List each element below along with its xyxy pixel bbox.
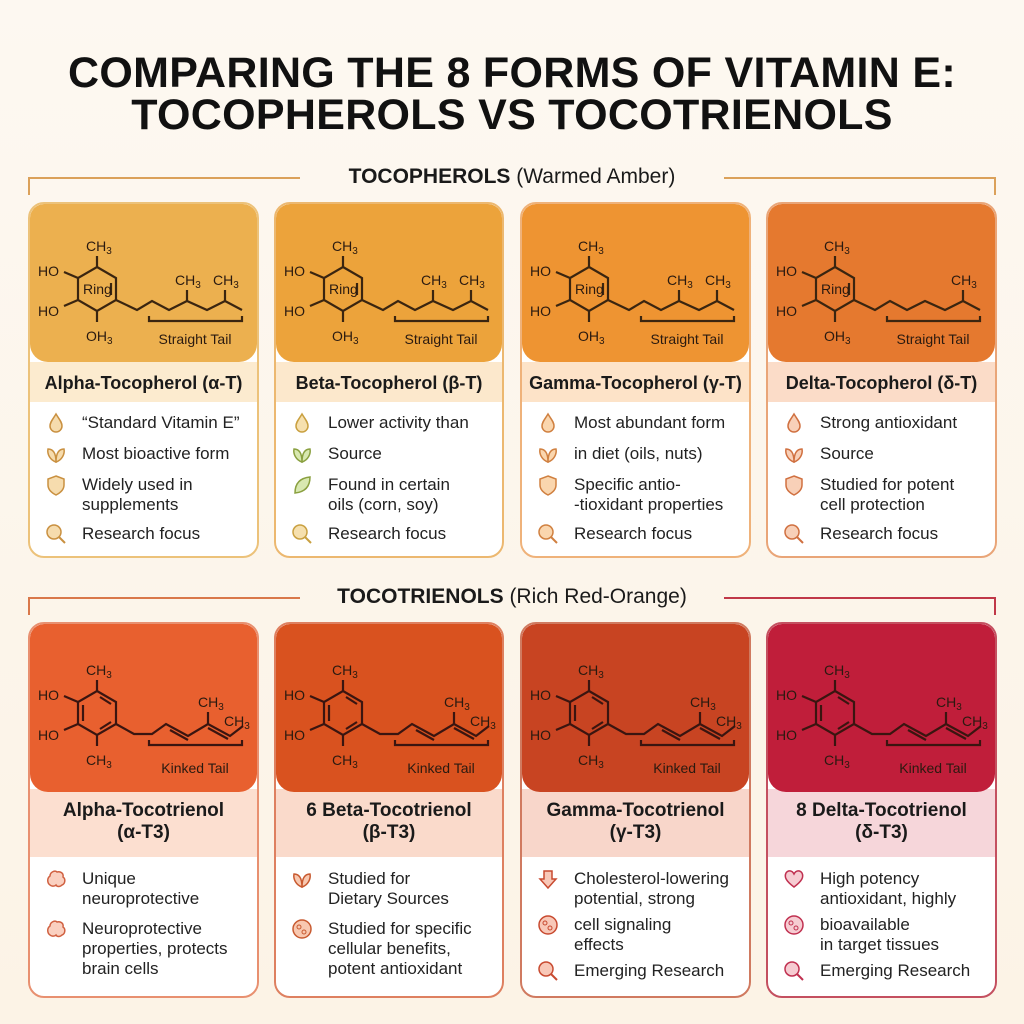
list: effects: [574, 935, 624, 954]
molecule: 3: [725, 280, 731, 291]
title: [68, 49, 956, 139]
name: [546, 800, 725, 843]
molecule: 3: [353, 336, 359, 347]
molecule: 3: [352, 760, 358, 771]
card: alpha-tocotrienol: [28, 622, 259, 998]
molecule: 3: [106, 760, 112, 771]
list: Found in certain: [328, 475, 450, 494]
molecule: OH: [332, 328, 353, 344]
list: antioxidant, highly: [820, 889, 956, 908]
list: Strong antioxidant: [820, 413, 957, 432]
molecule: CH: [459, 272, 479, 288]
card: beta-tocotrienol: [274, 622, 504, 998]
molecule: Kinked Tail: [161, 760, 229, 776]
molecule: HO: [530, 727, 551, 743]
list: cellular benefits,: [328, 939, 451, 958]
list: [784, 412, 957, 544]
name: Beta-Tocopherol (β-T): [296, 373, 482, 393]
list: oils (corn, soy): [328, 495, 439, 514]
name: Delta-Tocopherol (δ-T): [786, 373, 977, 393]
text: TOCOPHEROLS (Warmed Amber): [349, 165, 675, 188]
molecule: [530, 662, 742, 776]
list: Emerging Research: [820, 961, 970, 980]
list: “Standard Vitamin E”: [82, 413, 239, 432]
name: (γ-T3): [610, 822, 661, 843]
name: 8 Delta-Tocotrienol: [796, 800, 967, 821]
molecule: Ring: [83, 281, 112, 297]
list: Most bioactive form: [82, 444, 229, 463]
list: bioavailable: [820, 915, 910, 934]
list: Unique: [82, 869, 136, 888]
list: Source: [820, 444, 874, 463]
list: [538, 412, 725, 544]
molecule: 3: [844, 246, 850, 257]
name: 6 Beta-Tocotrienol: [306, 800, 472, 821]
molecule: HO: [530, 263, 551, 279]
list: in target tissues: [820, 935, 939, 954]
card: alpha-tocopherol: [28, 202, 259, 558]
list: Lower activity than: [328, 413, 469, 432]
molecule: 3: [195, 280, 201, 291]
name: Alpha-Tocopherol (α-T): [45, 373, 242, 393]
molecule: 3: [107, 336, 113, 347]
molecule: OH: [86, 328, 107, 344]
molecule: Kinked Tail: [899, 760, 967, 776]
molecule: Straight Tail: [159, 331, 231, 347]
list: -tioxidant properties: [574, 495, 723, 514]
molecule: 3: [598, 246, 604, 257]
molecule: 3: [844, 670, 850, 681]
molecule: Ring: [821, 281, 850, 297]
list: Studied for specific: [328, 919, 472, 938]
molecule: 3: [710, 702, 716, 713]
molecule: 3: [845, 336, 851, 347]
molecule: 3: [844, 760, 850, 771]
molecule: 3: [956, 702, 962, 713]
molecule: CH: [86, 752, 106, 768]
molecule: 3: [971, 280, 977, 291]
list: Dietary Sources: [328, 889, 449, 908]
molecule: 3: [598, 760, 604, 771]
list: Source: [328, 444, 382, 463]
molecule: CH: [705, 272, 725, 288]
text: TOCOTRIENOLS (Rich Red-Orange): [337, 585, 687, 608]
molecule: 3: [479, 280, 485, 291]
molecule: Straight Tail: [405, 331, 477, 347]
list: Neuroprotective: [82, 919, 202, 938]
card: gamma-tocopherol: [520, 202, 751, 558]
list: in diet (oils, nuts): [574, 444, 702, 463]
molecule: CH: [213, 272, 233, 288]
molecule: 3: [352, 246, 358, 257]
list: [538, 869, 729, 981]
molecule: 3: [599, 336, 605, 347]
list: neuroprotective: [82, 889, 199, 908]
card: gamma-tocotrienol: [520, 622, 751, 998]
molecule: Ring: [575, 281, 604, 297]
molecule: HO: [284, 263, 305, 279]
molecule: 3: [464, 702, 470, 713]
list: [46, 412, 239, 544]
list: Specific antio-: [574, 475, 681, 494]
molecule: Ring: [329, 281, 358, 297]
list: cell signaling: [574, 915, 671, 934]
title: COMPARING THE 8 FORMS OF VITAMIN E:: [68, 49, 956, 97]
molecule: HO: [38, 727, 59, 743]
list: Research focus: [574, 524, 692, 543]
molecule: CH: [444, 694, 464, 710]
molecule: CH: [962, 713, 982, 729]
molecule: CH: [578, 238, 598, 254]
list: properties, protects: [82, 939, 228, 958]
list: Research focus: [820, 524, 938, 543]
molecule: 3: [244, 721, 250, 732]
molecule: [776, 238, 982, 347]
molecule: HO: [284, 303, 305, 319]
molecule: 3: [598, 670, 604, 681]
molecule: 3: [106, 246, 112, 257]
molecule: CH: [332, 238, 352, 254]
molecule: Kinked Tail: [407, 760, 475, 776]
molecule: 3: [218, 702, 224, 713]
molecule: [284, 662, 496, 776]
list: cell protection: [820, 495, 925, 514]
molecule: HO: [38, 687, 59, 703]
molecule: Straight Tail: [897, 331, 969, 347]
molecule: OH: [824, 328, 845, 344]
card: beta-tocopherol: [274, 202, 504, 558]
molecule: HO: [530, 303, 551, 319]
list: High potency: [820, 869, 919, 888]
molecule: CH: [936, 694, 956, 710]
molecule: CH: [224, 713, 244, 729]
name: Alpha-Tocotrienol: [63, 800, 224, 821]
list: [292, 412, 469, 544]
list: potent antioxidant: [328, 959, 462, 978]
molecule: Straight Tail: [651, 331, 723, 347]
molecule: 3: [233, 280, 239, 291]
molecule: CH: [421, 272, 441, 288]
list: potential, strong: [574, 889, 695, 908]
list: Most abundant form: [574, 413, 725, 432]
name: [63, 800, 224, 843]
molecule: CH: [690, 694, 710, 710]
molecule: HO: [776, 687, 797, 703]
list: Studied for potent: [820, 475, 954, 494]
name: (δ-T3): [855, 822, 908, 843]
molecule: 3: [352, 670, 358, 681]
molecule: CH: [86, 662, 106, 678]
molecule: CH: [470, 713, 490, 729]
molecule: CH: [578, 752, 598, 768]
name: (α-T3): [117, 822, 170, 843]
molecule: CH: [332, 662, 352, 678]
molecule: HO: [776, 303, 797, 319]
list: Research focus: [82, 524, 200, 543]
list: Studied for: [328, 869, 410, 888]
list: Research focus: [328, 524, 446, 543]
list: Widely used in: [82, 475, 193, 494]
molecule: 3: [982, 721, 988, 732]
molecule: CH: [198, 694, 218, 710]
molecule: CH: [824, 238, 844, 254]
molecule: CH: [951, 272, 971, 288]
molecule: CH: [716, 713, 736, 729]
list: supplements: [82, 495, 178, 514]
name: Gamma-Tocopherol (γ-T): [529, 373, 742, 393]
name: [796, 800, 967, 843]
molecule: HO: [776, 263, 797, 279]
name: (β-T3): [363, 822, 415, 843]
molecule: [38, 238, 244, 347]
molecule: CH: [824, 662, 844, 678]
molecule: 3: [441, 280, 447, 291]
list: Cholesterol-lowering: [574, 869, 729, 888]
list: [292, 869, 472, 978]
molecule: 3: [106, 670, 112, 681]
molecule: CH: [86, 238, 106, 254]
molecule: CH: [578, 662, 598, 678]
list: [47, 869, 228, 978]
molecule: HO: [284, 727, 305, 743]
molecule: HO: [38, 303, 59, 319]
molecule: [530, 238, 736, 347]
molecule: [284, 238, 490, 347]
molecule: 3: [490, 721, 496, 732]
molecule: 3: [687, 280, 693, 291]
card: delta-tocopherol: [766, 202, 997, 558]
title: TOCOPHEROLS VS TOCOTRIENOLS: [131, 91, 893, 139]
list: brain cells: [82, 959, 159, 978]
molecule: [776, 662, 988, 776]
molecule: [38, 662, 250, 776]
list: Emerging Research: [574, 961, 724, 980]
molecule: HO: [530, 687, 551, 703]
molecule: CH: [667, 272, 687, 288]
molecule: 3: [736, 721, 742, 732]
name: [306, 800, 472, 843]
molecule: Kinked Tail: [653, 760, 721, 776]
molecule: HO: [38, 263, 59, 279]
card: delta-tocotrienol: [766, 622, 997, 998]
molecule: HO: [284, 687, 305, 703]
molecule: OH: [578, 328, 599, 344]
list: [784, 869, 970, 981]
molecule: CH: [332, 752, 352, 768]
molecule: CH: [175, 272, 195, 288]
name: Gamma-Tocotrienol: [546, 800, 725, 821]
molecule: HO: [776, 727, 797, 743]
molecule: CH: [824, 752, 844, 768]
